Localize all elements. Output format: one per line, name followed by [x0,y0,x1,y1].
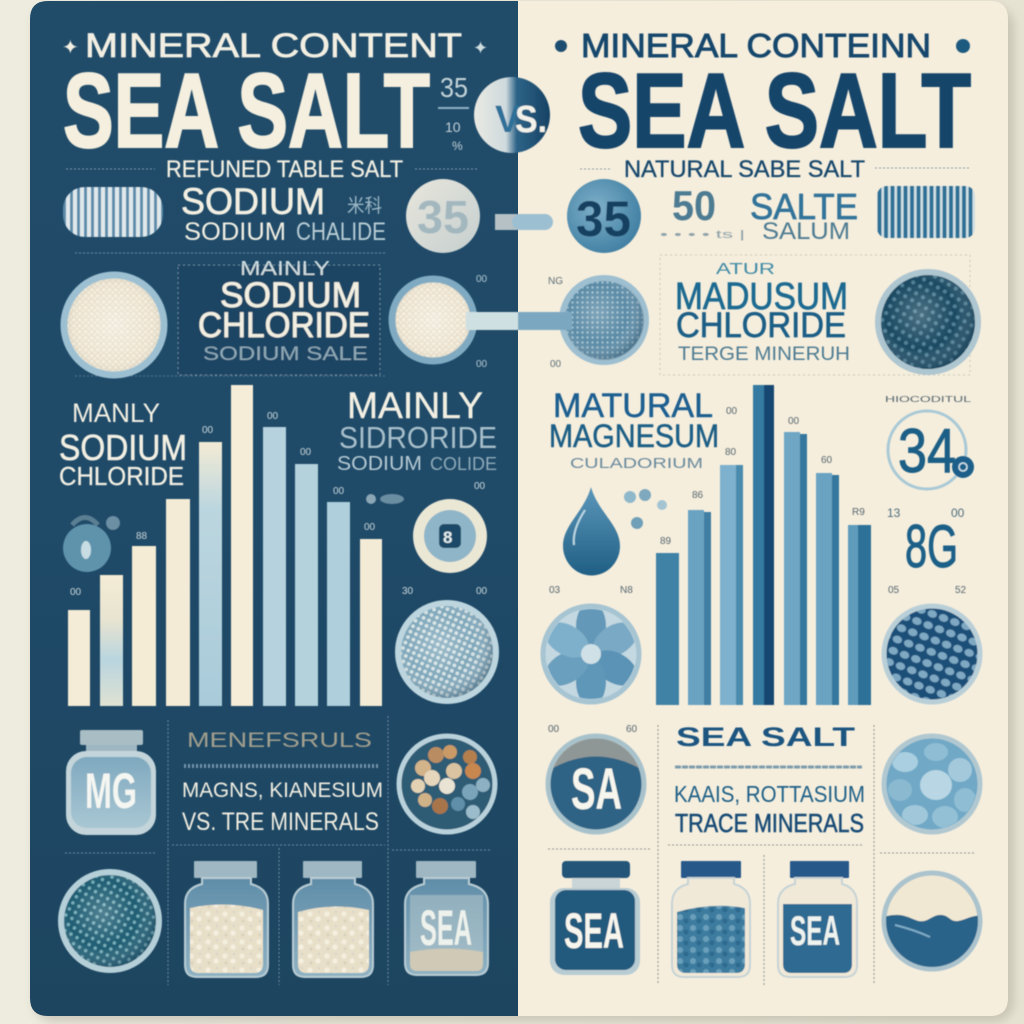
text block: right salt line: • • • • ts | [660,229,745,241]
stat: 8G [887,506,965,580]
vs badge: V [495,99,521,141]
icon: teal dotted bowl [61,872,159,970]
right matural label [549,387,719,472]
text block: sodium left: SODIUM [184,218,286,246]
icon: dark mineral chunks bowl: 52 [955,585,967,596]
stat: 34 dial: HIOCODITUL [885,395,972,404]
stat: 34 dial: 34 [898,417,956,486]
icon: bowl of fine salt left [64,275,164,375]
right lower grid lines [548,725,976,985]
icon: blue salt jar [672,861,750,977]
text block: right salt line [660,182,858,245]
icon: salt spoon left: 00 [476,274,488,285]
left mainly label [337,385,497,475]
side stat [438,72,469,153]
left bar chart: 00 [202,425,214,436]
text block: sea salt minerals right [674,722,865,838]
icon: dotted salt bowl [398,586,496,701]
right madusum box: ATUR [716,261,775,278]
text block: sodium left: SODIUM [181,181,325,222]
text block: sodium left [181,181,386,246]
icon: button dial: 00 [474,481,486,492]
right bar chart: 80 [725,447,737,458]
left bar chart: 00 [364,522,376,533]
text block: minerals left [182,729,383,836]
icon: SA badge: 60 [626,724,638,735]
text block: sodium left: 米科 [347,195,382,217]
left manly label: MANLY [72,398,160,428]
icon: right ornament [956,39,970,53]
icon: striped salt crystal left [63,187,163,237]
right bar chart: 00 [726,406,738,417]
panel: refined table salt (navy left side) [30,1,518,1016]
left mainly box: MAINLY [240,258,330,280]
right matural label: MATURAL [553,387,713,425]
icon: left star: ✦ [62,37,79,59]
icon: salt spoon left [392,274,518,370]
icon: MG jar: MG [85,763,137,819]
panel: natural sea salt (cream right side) [518,1,1008,1016]
left mainly label: SIDRORIDE [339,420,497,455]
icon: salt jar 1 [185,861,268,977]
text block: minerals left: VS. TRE MINERALS [182,808,379,836]
icon: salt spoon right [518,276,646,370]
left manly label [59,398,187,491]
icon: barcode crystal right [877,186,975,238]
left header [62,27,488,170]
text block: sea salt minerals right: SEA SALT [676,722,856,752]
icon: salt spoon right: NG [548,276,563,287]
icon: small water lock [63,516,120,572]
left bar chart: 00 [300,447,312,458]
right matural label: MAGNESUM [549,418,719,454]
heading: mineral content left: MINERAL CONTENT [85,27,462,65]
left bar chart: 88 [136,531,148,542]
icon: SEA label jar [778,861,857,977]
text block: minerals left: MAGNS, KIANESIUM [182,779,383,802]
right madusum box [660,255,970,375]
text block: sea salt minerals right: KAAIS, ROTTASIUM [674,781,865,807]
icon: water drop [549,487,667,596]
icon: mixed minerals bowl [399,736,495,832]
left mainly box [75,253,385,376]
icon: salt spoon left: 00 [476,359,488,370]
left mainly label: SODIUM [337,453,422,475]
text block: sea salt minerals right: TRACE MINERALS [675,808,864,838]
stat: 34 dial [885,395,974,489]
side stat: % [452,139,463,153]
icon: sea wave bowl [880,873,985,980]
left bar chart: 00 [333,486,345,497]
badge: 35 left [406,179,480,253]
icon: SEA jar navy: SEA [564,903,624,959]
icon: dark mineral chunks bowl [884,585,980,702]
icon: SEA jar left: SEA [420,900,472,956]
icon: SA badge: SA [571,757,622,822]
vs badge [474,77,550,153]
left mainly box: CHLORIDE [198,306,370,345]
left mainly box: SODIUM [220,276,361,315]
icon: salt spoon right: 00 [550,359,562,370]
right madusum box: TERGE MINERUH [678,344,850,365]
stat: 8G: 8G [905,513,958,580]
left subtitle: REFUNED TABLE SALT [166,156,403,183]
icon: salt jar 2 [293,861,373,977]
right bar chart: 00 [788,416,800,427]
stat: 8G: 00 [951,506,965,520]
right header [555,27,971,170]
icon: SA badge: 00 [548,724,560,735]
text block: right salt line: SALTE [750,186,858,227]
icon: button dial: 8 [443,528,452,547]
left manly label: CHLORIDE [59,461,184,491]
left mainly label: MAINLY [347,385,483,426]
text block: sodium left: CHALIDE [296,218,386,246]
icon: SEA jar navy [550,861,640,975]
icon: water drop: 03 [549,585,561,596]
icon: SEA jar left [405,861,488,975]
left manly label: SODIUM [59,427,187,468]
right madusum box: MADUSUM [675,276,848,318]
icon: left ornament [555,40,567,52]
right matural label: CULADORIUM [570,455,703,472]
right madusum box: CHLORIDE [676,306,846,345]
text block: right salt line: SALUM [762,218,850,245]
text block: right salt line: 50 [672,182,716,229]
right bar chart: R9 [852,507,865,518]
left bar chart: 00 [267,411,279,422]
icon: SEA label jar: SEA [790,907,840,954]
vs badge: S. [515,99,547,141]
right bar chart: 86 [692,490,704,501]
right bar chart: 89 [660,536,672,547]
text block: minerals left: MENEFSRULS [187,729,372,752]
icon: dark mineral chunks bowl: 05 [888,585,900,596]
left bar chart [68,385,382,706]
icon: blue crystals bowl [884,736,980,832]
icon: SA badge [548,724,644,832]
badge: 35 left: 35 [417,191,469,243]
icon: dotted salt bowl: 30 [402,586,414,597]
badge: 35 right: 35 [576,191,631,247]
right bar chart [656,385,871,705]
icon: blue flower bowl [538,602,644,706]
left mainly label: COLIDE [430,454,497,474]
right subtitle: NATURAL SABE SALT [624,156,865,183]
right bar chart: 60 [821,455,833,466]
left mainly box: SODIUM SALE [203,344,368,365]
side stat: 10 [445,119,461,135]
side stat: 35 [440,72,468,103]
connector between 35 badges [495,214,553,230]
title: sea salt left: SEA SALT [63,52,430,170]
left bar chart: 00 [70,587,82,598]
heading: mineral content right: MINERAL CONTEINN [581,27,931,64]
icon: dotted salt bowl: 00 [476,586,488,597]
icon: button dial [366,481,487,573]
left lower grid lines [65,716,492,985]
icon: MG jar [66,730,156,835]
icon: right star: ✦ [473,38,488,58]
stat: 8G: 13 [887,506,901,520]
icon: dark mineral bowl right [878,272,978,372]
icon: water drop: N8 [620,585,633,596]
badge: 35 right [567,179,641,253]
